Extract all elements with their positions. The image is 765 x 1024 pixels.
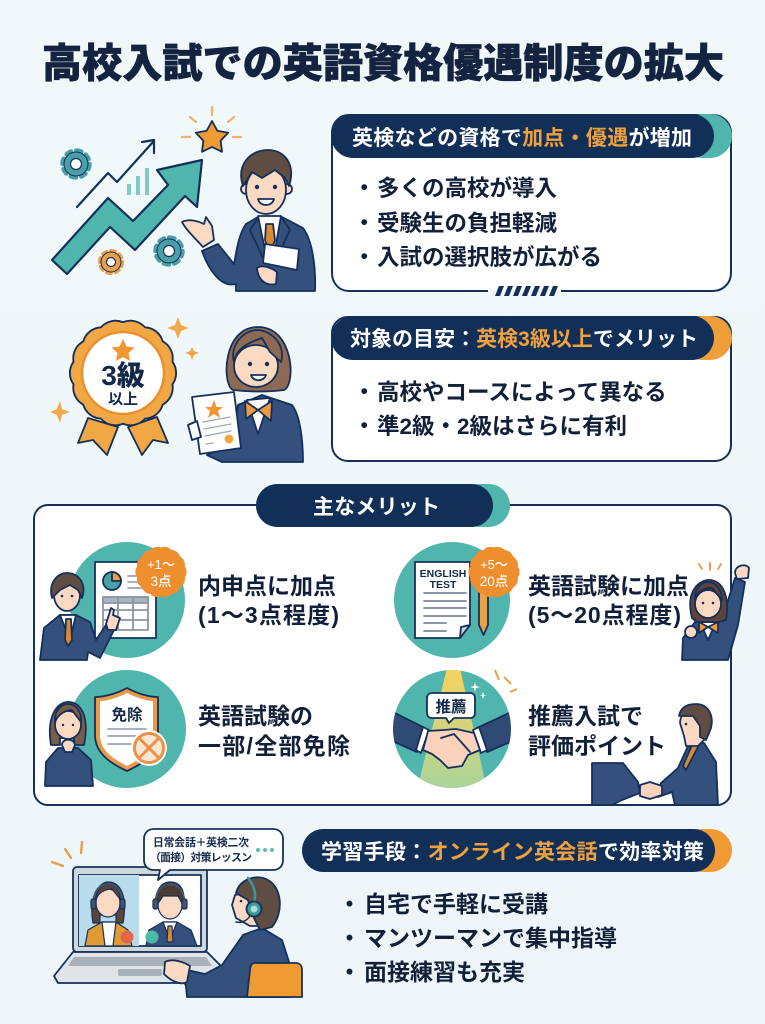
heading text: 学習手段：オンライン英会話で効率対策 (321, 841, 704, 864)
bullet list: 準2級・2級はさらに有利 (377, 414, 627, 439)
icon: thin rising arrow (77, 140, 154, 207)
icon: shield (95, 688, 158, 771)
badge: +1〜3点: +1～ (147, 557, 175, 572)
text: recommendation exam: 推薦入試で (528, 703, 643, 729)
bullet list (353, 175, 602, 270)
text: report card bonus: (1～3点程度) (198, 602, 339, 628)
icon: star with rays (182, 107, 241, 152)
icon circle (68, 670, 186, 788)
panel: learning method (302, 829, 732, 985)
bullet list: ・ (353, 245, 376, 270)
illustration: online lesson (52, 829, 302, 997)
businessman presenting (182, 150, 315, 291)
badge: +1〜3点 (135, 547, 187, 597)
bullet list: ・ (338, 925, 361, 951)
medal sublabel: 以上 (108, 391, 138, 408)
badge: +1〜3点: 3点 (150, 574, 172, 589)
text: test exemption: 一部/全部免除 (198, 733, 350, 759)
text: test exemption (198, 703, 350, 759)
label: ENGLISH TEST: TEST (430, 579, 457, 591)
icon: handshake with spotlight (390, 668, 515, 790)
badge: +5〜20点 (468, 547, 520, 597)
heading pill (331, 316, 732, 360)
heading text: 対象の目安：英検3級以上でメリット (350, 328, 698, 351)
heading pill (256, 484, 510, 527)
icon: rays (52, 842, 82, 866)
icon: clasped hands (423, 729, 480, 768)
merit: English test bonus (394, 542, 749, 660)
bullet list: 自宅で手軽に受講 (364, 891, 548, 917)
callout: 推薦 (427, 693, 475, 723)
icon: stripes (495, 286, 558, 296)
bullet list: 受験生の負担軽減 (377, 211, 558, 236)
heading text: 英検などの資格で加点・優遇が増加 (352, 126, 692, 150)
icon: cross mark (131, 730, 167, 766)
icon circle (69, 542, 185, 658)
text: English test bonus: (5～20点程度) (528, 602, 681, 628)
bullet list: ・ (353, 211, 376, 236)
panel: target level (331, 316, 732, 461)
icon: sparkles (50, 317, 199, 423)
text: English test bonus (528, 573, 689, 628)
bullet list: マンツーマンで集中指導 (364, 925, 617, 951)
callout: lesson bubble: 日常会話＋英検二次 (153, 835, 249, 849)
title: 高校入試での英語資格優遇制度の拡大 (42, 42, 724, 86)
bullet list: ・ (353, 414, 376, 439)
icon: mini bar chart (127, 168, 149, 195)
bullet list: 高校やコースによって異なる (377, 380, 667, 405)
icon circle (393, 670, 511, 788)
icon: teal gear (156, 238, 182, 264)
icon: big teal arrow (52, 160, 202, 274)
person: relieved woman (45, 702, 93, 786)
bullet list: ・ (338, 891, 361, 917)
person: teacher on screen (146, 882, 197, 946)
merit: test exemption (45, 670, 350, 788)
illustration: medal and student (50, 317, 303, 462)
person: woman on screen (85, 882, 134, 946)
merit: recommendation exam (390, 668, 718, 805)
heading text: 主なメリット (313, 496, 440, 519)
text: recommendation exam (528, 703, 666, 759)
text: recommendation exam: 評価ポイント (528, 733, 666, 759)
text: test exemption: 英語試験の (198, 703, 313, 729)
bullet list (338, 891, 617, 985)
heading pill (302, 829, 732, 872)
bullet list: ・ (353, 380, 376, 405)
icon: orange gear (100, 251, 122, 273)
icon: rays and sparkles (470, 670, 517, 699)
icon: pencil (479, 590, 488, 635)
panel border (34, 505, 731, 805)
text: report card bonus (198, 573, 339, 628)
medal label: 3級 (101, 360, 145, 391)
icon: document with table (95, 562, 156, 638)
text: English test bonus: 英語試験に加点 (528, 573, 689, 599)
text: report card bonus: 内申点に加点 (198, 573, 336, 599)
bullet list (353, 380, 667, 439)
bullet list: ・ (353, 176, 376, 201)
merit: report card bonus (40, 542, 339, 660)
icon: laptop (54, 867, 230, 983)
badge: +5〜20点: +5～ (480, 557, 508, 572)
callout: lesson bubble: （面接）対策レッスン (150, 850, 252, 864)
illustration: rising arrow with businessman (52, 107, 315, 291)
icon: ribbon tails (78, 417, 168, 455)
panel border (332, 115, 731, 291)
bullet list: 入試の選択肢が広がる (377, 244, 602, 270)
callout: 推薦: 推薦 (435, 698, 467, 716)
panel: qualification bonus (331, 114, 732, 296)
icon: medal rosette (70, 321, 176, 425)
person: student with headset (164, 877, 302, 997)
label: ENGLISH TEST: ENGLISH (420, 568, 466, 580)
bullet list: 面接練習も充実 (364, 959, 525, 985)
panel: main merits (34, 484, 749, 805)
icon: teal gear (62, 150, 90, 178)
person: cheering girl (682, 563, 749, 660)
label: 免除: 免除 (111, 705, 143, 724)
person: man shaking hands (592, 704, 718, 805)
label: ENGLISH TEST (420, 568, 466, 591)
person: man pointing (40, 573, 120, 660)
panel border (332, 317, 731, 461)
icon: test sheet (415, 562, 470, 638)
badge: +5〜20点: 20点 (480, 574, 508, 589)
female student with certificate (188, 327, 303, 462)
bullet list: 多くの高校が導入 (377, 175, 557, 201)
heading pill (331, 114, 732, 158)
icon circle (394, 542, 510, 658)
bullet list: ・ (338, 959, 361, 985)
callout: lesson bubble (144, 829, 283, 880)
